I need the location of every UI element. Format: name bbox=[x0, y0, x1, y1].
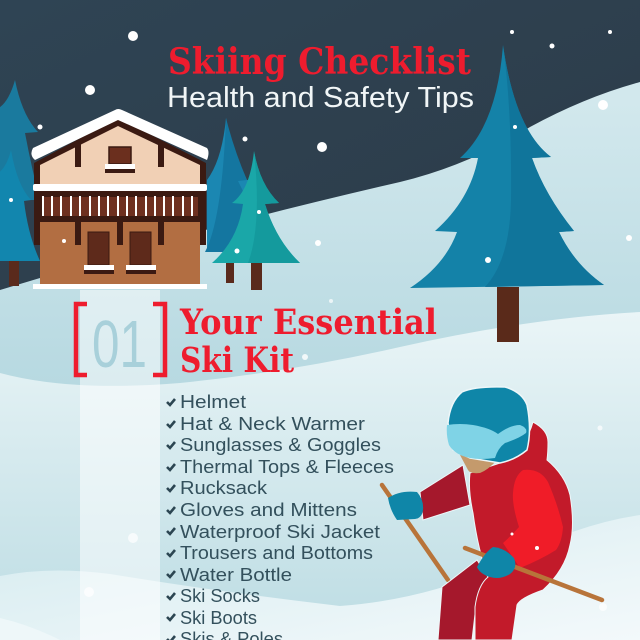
bottom left snow drift bbox=[0, 618, 60, 640]
number 01: 01 bbox=[92, 307, 147, 382]
near arm bbox=[503, 470, 563, 568]
item: Trousers and Bottoms: Trousers and Bottoms bbox=[180, 542, 373, 563]
skier bbox=[382, 387, 602, 640]
right bracket bbox=[153, 304, 165, 375]
item: Rucksack: Rucksack bbox=[180, 477, 268, 498]
house bbox=[31, 109, 209, 289]
item: Hat and Neck Warmer: Hat & Neck Warmer bbox=[180, 413, 365, 434]
title: Skiing Checklist bbox=[168, 41, 471, 83]
tree: blue behind house bbox=[205, 118, 250, 283]
right glove bbox=[477, 547, 515, 578]
left ski pole bbox=[382, 485, 448, 580]
face bbox=[460, 455, 497, 473]
upper timber posts bbox=[75, 143, 81, 167]
tree: teal bbox=[212, 151, 300, 290]
left bracket bbox=[76, 304, 87, 375]
checklist bbox=[167, 391, 394, 640]
base snow bbox=[33, 284, 207, 289]
night sky background bbox=[0, 0, 640, 300]
lower timber posts bbox=[75, 222, 164, 245]
goggles bbox=[447, 424, 526, 459]
torso and near leg bbox=[469, 422, 572, 640]
tree: large right bbox=[410, 45, 604, 342]
item: Gloves and Mittens: Gloves and Mittens bbox=[180, 499, 357, 520]
upper wall bbox=[40, 126, 200, 186]
lower snow hill bbox=[0, 515, 640, 640]
far snow hill bbox=[0, 82, 640, 400]
balcony bbox=[34, 190, 206, 245]
helmet bbox=[448, 387, 530, 463]
pale ski path strip bbox=[80, 290, 160, 640]
item: Sunglasses and Goggles: Sunglasses & Goggles bbox=[180, 434, 381, 455]
roof snow bbox=[31, 109, 209, 160]
item: Waterproof Ski Jacket: Waterproof Ski Jacket bbox=[180, 521, 380, 542]
section heading bbox=[179, 302, 437, 381]
far leg bbox=[438, 560, 488, 640]
balcony railing bbox=[43, 196, 192, 216]
item: Water Bottle: Water Bottle bbox=[180, 564, 292, 585]
far arm bbox=[420, 465, 470, 520]
left glove bbox=[388, 492, 423, 520]
item: Thermal Tops and Fleeces: Thermal Tops & Fleeces bbox=[180, 456, 394, 477]
item: Ski Socks: Ski Socks bbox=[180, 585, 260, 606]
tree: far left upper bbox=[0, 80, 40, 200]
subtitle: Health and Safety Tips bbox=[167, 82, 474, 114]
gable dark frame bbox=[34, 118, 206, 222]
section heading: Your Essential bbox=[179, 302, 437, 343]
upper window bbox=[109, 147, 131, 164]
section number bbox=[76, 304, 165, 382]
balcony snow ledge bbox=[33, 184, 207, 191]
doors bbox=[88, 232, 109, 265]
middle snow hill bbox=[0, 312, 640, 640]
section heading: Ski Kit bbox=[180, 340, 294, 381]
item: Ski Boots: Ski Boots bbox=[180, 607, 257, 628]
tree: far left lower bbox=[0, 150, 40, 286]
right ski pole bbox=[465, 548, 602, 600]
brick ground floor bbox=[40, 222, 200, 284]
item: Helmet: Helmet bbox=[180, 391, 246, 412]
